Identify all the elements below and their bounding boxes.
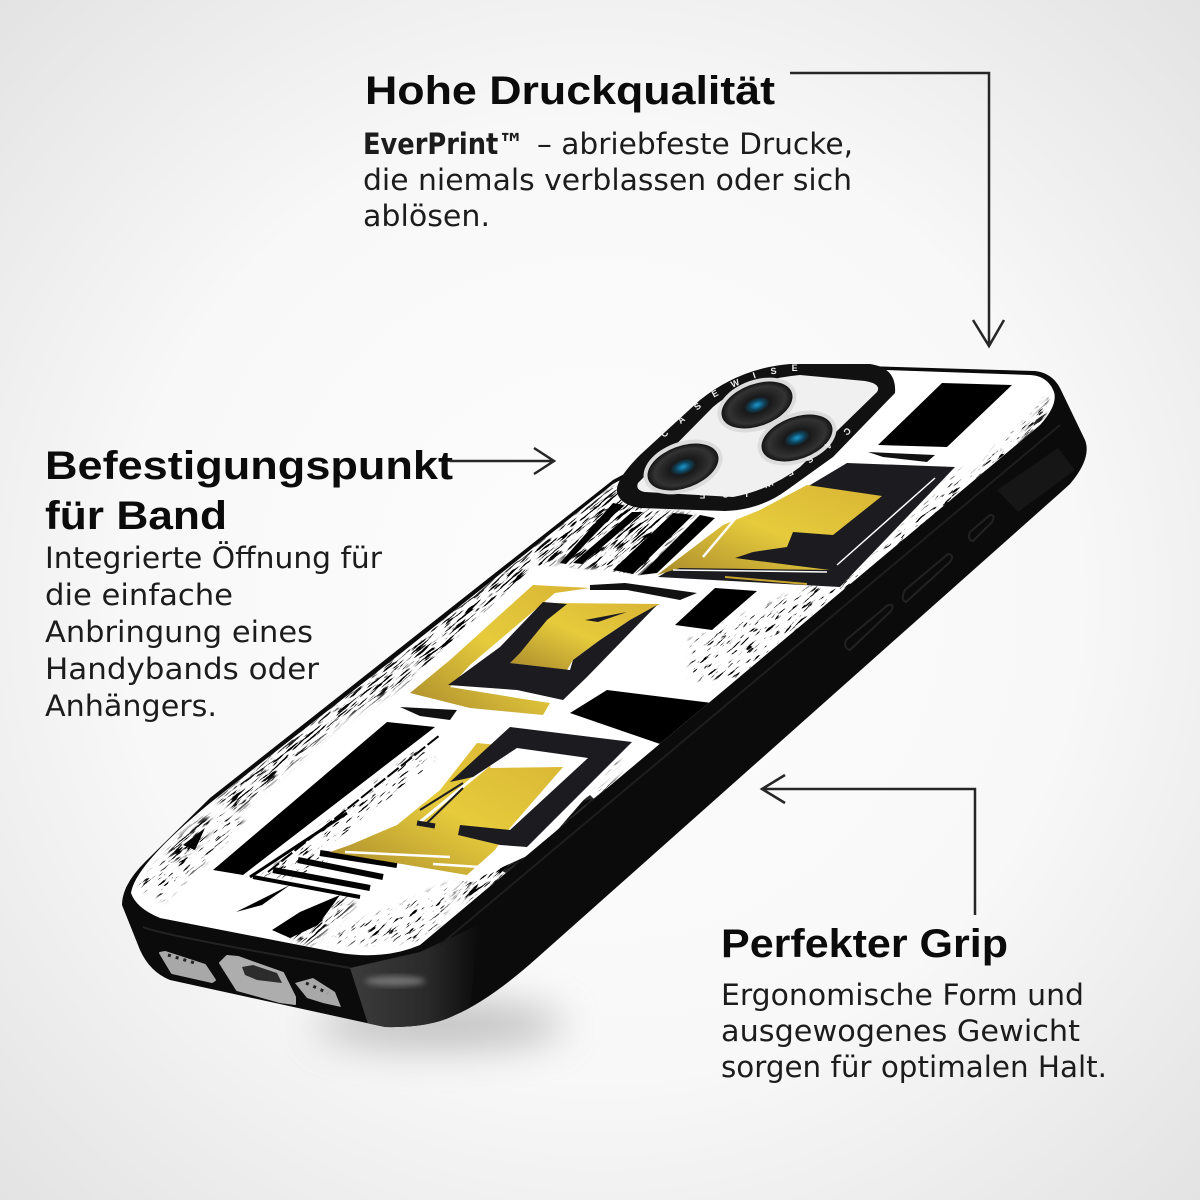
black bar: [570, 690, 712, 745]
description: Anhängers.: [45, 689, 217, 723]
black block top right: [878, 383, 1012, 447]
lens left: [636, 429, 730, 505]
heading: für Band: [45, 494, 227, 538]
description: die niemals verblassen oder sich: [363, 163, 852, 197]
white halo frame 2: [401, 565, 645, 692]
grunge blobs: [183, 795, 600, 938]
long black bar: [213, 722, 435, 875]
heading: [45, 444, 453, 538]
description: Ergonomische Form und: [721, 978, 1084, 1012]
callout: strap point: [45, 444, 453, 723]
black blocks: [675, 588, 757, 630]
camera glass: [637, 375, 878, 497]
ring brand text bottom: CASEWISE: [700, 428, 850, 498]
frame 3 dark: [450, 727, 632, 847]
phone shadow: [315, 1001, 565, 1049]
lens top: [710, 367, 804, 443]
thin bar: [868, 452, 935, 462]
arrow: grip: [762, 775, 975, 915]
phone case: [122, 364, 1087, 1028]
charging port and speakers: [160, 952, 341, 1007]
lower stripes: [253, 853, 397, 897]
heading: Perfekter Grip: [721, 922, 1008, 966]
description: Anbringung eines: [45, 615, 313, 649]
frame 3 white highlights: [344, 765, 491, 868]
description: EverPrint™: [363, 127, 524, 161]
arrow: strap point: [450, 448, 554, 474]
description: ablösen.: [363, 199, 490, 233]
lens right: [750, 400, 844, 476]
ring brand text top: CASEWISE: [662, 364, 798, 437]
white halo frame 3: [322, 754, 621, 882]
description: Handybands oder: [45, 652, 319, 686]
frame 2 outer gold: [410, 585, 590, 715]
callout: grip: [721, 922, 1107, 1084]
grunge sparse: [136, 396, 1050, 950]
frame 2 streak: [585, 612, 627, 622]
heading: Befestigungspunkt: [45, 444, 453, 488]
arrow: print quality: [790, 73, 1004, 346]
frame 2 gold inner: [510, 603, 660, 670]
heading: Hohe Druckqualität: [365, 69, 775, 113]
small top bar: [400, 707, 457, 720]
corner gloss: [143, 425, 1060, 1030]
grunge dense: [162, 397, 1052, 948]
description: ausgewogenes Gewicht: [721, 1014, 1080, 1048]
frame 2 top smudge: [590, 583, 697, 600]
stripes left of frame 1: [560, 503, 715, 575]
description: [721, 978, 1107, 1084]
description: [45, 541, 382, 723]
frame 1 gold: [657, 485, 882, 575]
frame 3 gold: [330, 743, 563, 875]
description: die einfache: [45, 578, 233, 612]
description: sorgen für optimalen Halt.: [721, 1050, 1107, 1084]
frame 2 dark: [448, 602, 657, 700]
frame 1 highlights: [673, 478, 935, 572]
description: Integrierte Öffnung für: [45, 541, 382, 575]
description: [363, 127, 853, 233]
camera ring: [616, 364, 896, 511]
description: – abriebfeste Drucke,: [537, 127, 853, 161]
case body: [122, 365, 1087, 1027]
callout: print quality: [363, 69, 853, 233]
frame 3 drips: [417, 783, 463, 826]
frame 1 dark: [658, 463, 955, 587]
thin lines by long bar: [250, 735, 440, 877]
screen artwork: [131, 370, 1055, 956]
side buttons: [845, 448, 1075, 650]
